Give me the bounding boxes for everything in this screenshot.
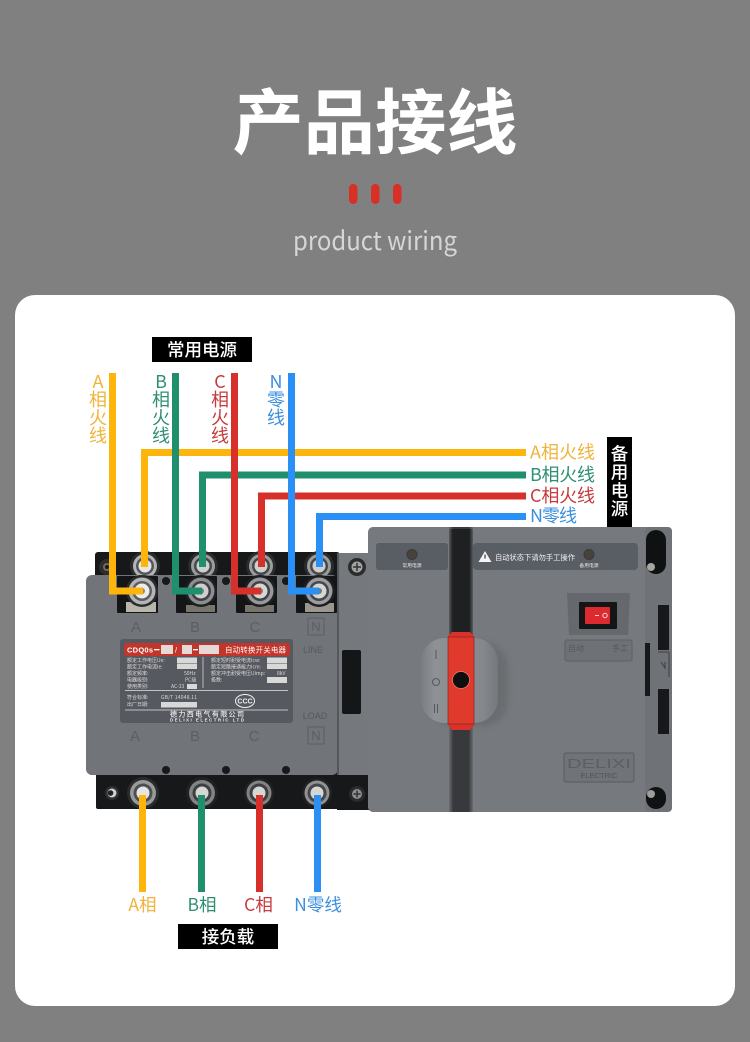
label: load B: B相 — [188, 892, 216, 917]
label: common A live — [89, 368, 107, 448]
red handle grip — [448, 632, 474, 730]
label: common C live — [211, 368, 229, 448]
label: common N neutral: 零 — [267, 386, 285, 412]
nameplate ratings: PC级 — [185, 676, 196, 684]
nameplate red header — [124, 643, 290, 656]
screw access dots — [162, 577, 290, 774]
right warning plate: 备用电源 — [579, 562, 599, 569]
nameplate ratings: 额定短时耐受电流Icw: — [211, 657, 261, 664]
terminal slots — [117, 576, 337, 613]
side mark — [658, 652, 669, 677]
label: backup N neutral: N零线 — [530, 502, 577, 528]
label: common B live — [152, 368, 170, 448]
nameplate dividers — [125, 657, 288, 710]
label: backup power: 备 — [611, 441, 629, 466]
label: common C live: 相 — [211, 386, 229, 412]
nameplate ratings: 额定短路接通能力Icm: — [211, 664, 262, 670]
wire: backup N — [320, 516, 526, 567]
centre channel lower — [449, 527, 473, 812]
label: common B live: 线 — [152, 422, 170, 448]
label: common C live: C — [214, 368, 226, 394]
left indicator plate: 常用电源 — [402, 562, 422, 569]
warning triangle — [478, 551, 492, 562]
CCC mark: CCC — [237, 698, 253, 706]
N boxes and line load marks: N — [311, 728, 321, 743]
lower row terminal screws — [126, 575, 335, 607]
nameplate header text: / — [175, 646, 178, 654]
embossed phase letters: C — [250, 619, 261, 636]
label: backup B live: B相火线 — [530, 461, 595, 487]
wire: common A — [112, 373, 143, 591]
label: common N neutral — [267, 368, 285, 430]
nameplate ratings: GB/T 14048.11 — [161, 694, 197, 701]
wires: common power lines — [112, 373, 319, 591]
bottom terminal screws — [127, 777, 332, 809]
mount hole bottom left — [105, 786, 119, 800]
label: common A live: 相 — [89, 386, 107, 412]
label: common A live: 火 — [89, 404, 107, 430]
brand logo plate: DELIXI — [567, 757, 631, 771]
nameplate ratings: 额定工作电流Ie: — [127, 664, 163, 670]
auto manual label — [565, 640, 632, 661]
CCC mark — [236, 694, 254, 708]
nameplate ratings: 使用类别: — [127, 683, 149, 690]
bottom screw — [349, 786, 365, 802]
manufacturer text: 德力西电气有限公司 — [170, 710, 244, 720]
handle hole — [452, 672, 470, 688]
title: 产品接线 — [232, 67, 518, 169]
wire: common N — [292, 373, 319, 591]
label: common A live: 线 — [89, 422, 107, 448]
N boxes and line load marks: LINE — [303, 645, 323, 655]
bottom corner slot — [646, 787, 666, 809]
panel: white wiring card — [15, 295, 735, 1006]
nameplate ratings — [127, 657, 286, 708]
label: load N: N零线 — [294, 892, 342, 917]
right warning plate — [473, 543, 638, 570]
interlock window — [342, 650, 361, 714]
rocker switch — [567, 593, 630, 635]
right side strip — [645, 527, 672, 812]
nameplate header text — [127, 644, 286, 656]
label: common C live: 线 — [211, 422, 229, 448]
wire: load N — [314, 795, 321, 892]
wire: backup B — [202, 475, 526, 567]
upper terminal screws — [130, 551, 334, 581]
rotary handle — [421, 632, 508, 730]
nameplate header text: 自动转换开关电器 — [225, 644, 286, 656]
embossed phase letters: C — [249, 728, 260, 745]
nameplate ratings: 8kV — [277, 670, 286, 677]
label: backup power: 用 — [611, 460, 628, 484]
nameplate header text: CDQ0s — [127, 646, 153, 654]
N boxes and line load marks: LOAD — [303, 711, 328, 721]
N boxes and line load marks — [303, 618, 328, 744]
bottom terminal strip — [96, 770, 341, 809]
N boxes and line load marks: N — [311, 619, 321, 634]
wires: load lines — [142, 795, 318, 892]
embossed phase letters — [130, 619, 261, 745]
nameplate ratings: 额定工作电压Ue: — [127, 657, 165, 664]
red dots accent — [349, 184, 402, 204]
label: connect load: 接负载 — [202, 924, 254, 949]
label: backup power — [607, 437, 632, 527]
product: middle link section — [337, 553, 370, 810]
top corner slot — [646, 530, 666, 574]
label: backup A live: A相火线 — [530, 438, 595, 464]
wire: backup C — [262, 496, 526, 567]
subtitle: product wiring — [293, 221, 457, 258]
right warning plate: 自动状态下请勿手工操作 — [495, 553, 576, 563]
brand logo plate: ELECTRIC — [580, 771, 618, 780]
handle position marks — [432, 650, 440, 713]
top terminal strip — [95, 552, 340, 582]
product: right transfer switch unit — [368, 527, 672, 812]
label: backup power: 源 — [611, 496, 629, 521]
manufacturer text: DELIXI ELECTRIC LTD — [170, 718, 245, 722]
mount hole top left — [99, 559, 115, 575]
left indicator plate — [376, 543, 448, 570]
brand logo plate — [564, 753, 634, 782]
label: connect load — [178, 924, 278, 949]
label: common N neutral: N — [269, 368, 283, 394]
embossed phase letters: B — [190, 619, 200, 636]
centre channel upper dark — [449, 529, 473, 637]
nameplate ratings: 出厂日期: — [127, 701, 149, 708]
wire: backup A — [144, 452, 526, 567]
wire: load B — [198, 795, 205, 892]
label: common B live: 火 — [152, 404, 170, 430]
label: common B live: B — [155, 368, 167, 394]
nameplate — [120, 639, 293, 723]
nameplate ratings: 极数: — [211, 676, 223, 684]
nameplate ratings: AC-33 — [171, 683, 185, 690]
nameplate ratings: 额定频率: — [127, 670, 149, 677]
wire: load A — [139, 795, 146, 892]
wire: common B — [176, 373, 202, 591]
label: common B live: 相 — [152, 386, 170, 412]
auto manual label: 自动 — [568, 643, 584, 654]
label: common A live: A — [93, 368, 104, 394]
auto manual label: 手工 — [612, 643, 628, 654]
wire: load C — [256, 795, 263, 892]
wire: common C — [234, 373, 261, 591]
nameplate value boxes — [161, 658, 287, 708]
label: backup C live: C相火线 — [530, 482, 595, 508]
product: left breaker unit — [86, 551, 341, 809]
nameplate ratings: 50Hz — [184, 670, 196, 677]
embossed phase letters: A — [130, 728, 140, 745]
embossed phase letters: B — [190, 728, 200, 745]
label: load A: A相 — [128, 892, 157, 917]
label: load C: C相 — [244, 892, 273, 917]
top screw — [348, 558, 366, 576]
label: backup power: 电 — [611, 478, 628, 503]
wires: backup power lines — [144, 452, 526, 567]
label: common C live: 火 — [211, 404, 229, 430]
breaker body — [86, 575, 338, 775]
nameplate ratings: 电器级别: — [127, 676, 149, 684]
nameplate ratings: 符合标准: — [127, 694, 149, 701]
embossed phase letters: A — [131, 619, 141, 636]
label: common power: 常用电源 — [167, 337, 237, 362]
nameplate ratings: 额定冲击耐受电压Uimp: — [211, 670, 266, 677]
side connectors — [645, 605, 669, 734]
label: common N neutral: 线 — [267, 404, 285, 430]
slot contact plates — [126, 602, 334, 612]
